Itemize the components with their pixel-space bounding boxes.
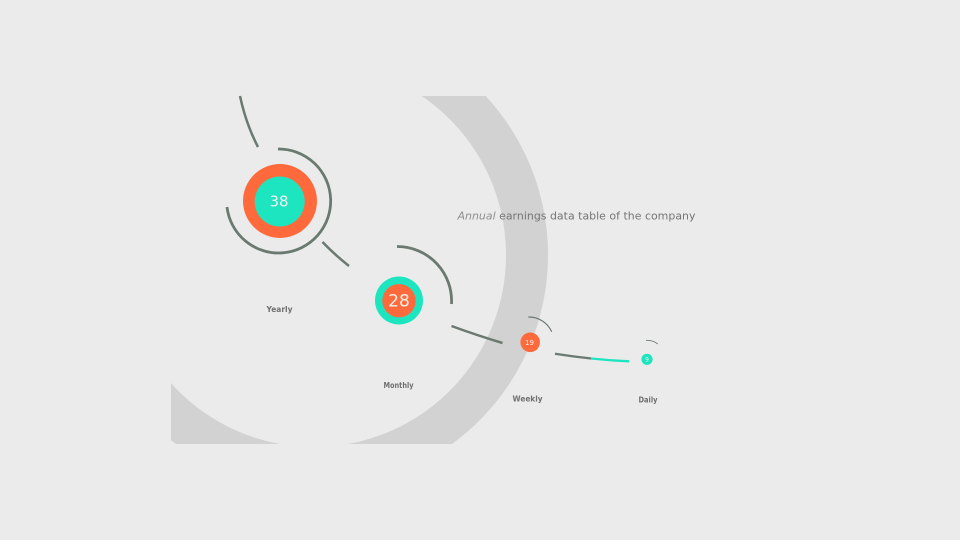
yearly value: 38: [269, 193, 289, 211]
yearly inner circle: [255, 176, 305, 226]
node: weekly: [520, 317, 552, 352]
connector: yearly to monthly: [322, 242, 349, 266]
label: yearly: Yearly: [266, 305, 293, 314]
label: monthly: Monthly: [384, 381, 414, 390]
node: yearly: [227, 149, 331, 253]
connector: top to yearly: [240, 96, 258, 147]
connector: weekly to daily: [555, 354, 629, 361]
background ring: [171, 96, 548, 444]
weekly arc: [528, 317, 552, 332]
monthly arc: [397, 246, 452, 304]
daily arc: [646, 340, 658, 344]
node: daily: [641, 340, 658, 365]
infographic canvas: [171, 96, 696, 444]
weekly value: 19: [525, 339, 534, 347]
daily circle: [641, 354, 653, 365]
connector: monthly to weekly: [452, 326, 502, 343]
title text: Annual earnings data table of the company: [457, 209, 696, 222]
yearly arc: [227, 149, 331, 253]
monthly outer circle: [375, 276, 423, 324]
node: monthly: [375, 246, 452, 324]
weekly circle: [520, 332, 540, 352]
monthly value: 28: [388, 292, 410, 312]
label: daily: Daily: [638, 395, 658, 404]
daily value: 9: [645, 356, 649, 364]
label: weekly: Weekly: [512, 394, 543, 403]
yearly outer circle: [243, 164, 317, 238]
monthly inner circle: [382, 284, 416, 317]
